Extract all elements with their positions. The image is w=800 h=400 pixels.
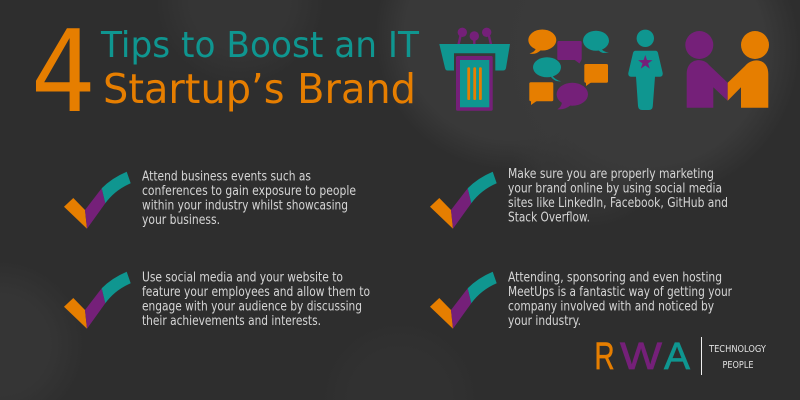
title line 2: Startup’s Brand [103, 65, 416, 113]
tip 4 [430, 270, 733, 329]
tip 2 text: sites like LinkedIn, Facebook, GitHub and [508, 196, 728, 211]
tip 2 text [508, 167, 728, 226]
icon: check mark 1 [64, 172, 131, 229]
tip 4 text: Attending, sponsoring and even hosting [508, 270, 722, 286]
logo letters: W [620, 336, 662, 378]
logo letters [594, 336, 691, 378]
tip 3 text: Use social media and your website to [142, 270, 343, 286]
logo letters: R [594, 336, 614, 378]
icon: check mark 3 [64, 272, 131, 329]
tip 4 text [508, 270, 733, 329]
logo tagline: PEOPLE [722, 360, 754, 371]
tip 1 text: within your industry whilst showcasing [142, 198, 348, 214]
tip 4 text: company involved with and noticed by [508, 300, 714, 314]
tip 2 text: Make sure you are properly marketing [508, 167, 714, 182]
icon: check mark 4 [430, 272, 497, 329]
icon: speech bubbles [528, 30, 609, 109]
icon: podium [439, 28, 510, 111]
tip 1 text: your business. [142, 213, 220, 228]
icon: handshake figures [685, 31, 769, 108]
logo tagline: TECHNOLOGY [708, 344, 767, 355]
tip 3 text: their achievements and interests. [142, 314, 321, 329]
logo [594, 336, 767, 378]
icon: check mark 2 [430, 172, 497, 229]
title number 4: 4 [31, 6, 96, 138]
icon: person with star [628, 30, 663, 110]
tip 4 text: MeetUps is a fantastic way of getting your [508, 285, 733, 300]
title line 1: Tips to Boost an IT [100, 25, 420, 66]
logo tagline [708, 344, 767, 371]
tip 3 [64, 270, 370, 329]
tip 1 [64, 170, 356, 229]
tip 2 [430, 167, 728, 229]
tip 1 text [142, 170, 356, 228]
logo letters: A [664, 336, 691, 378]
tip 3 text: feature your employees and allow them to [142, 285, 370, 300]
tip 1 text: Attend business events such as [142, 170, 311, 184]
tip 2 text: Stack Overflow. [508, 210, 590, 226]
tip 4 text: your industry. [508, 314, 581, 329]
tip 2 text: your brand online by using social media [508, 182, 722, 196]
tip 1 text: conferences to gain exposure to people [142, 184, 356, 199]
tip 3 text: engage with your audience by discussing [142, 300, 362, 314]
tip 3 text [142, 270, 370, 329]
